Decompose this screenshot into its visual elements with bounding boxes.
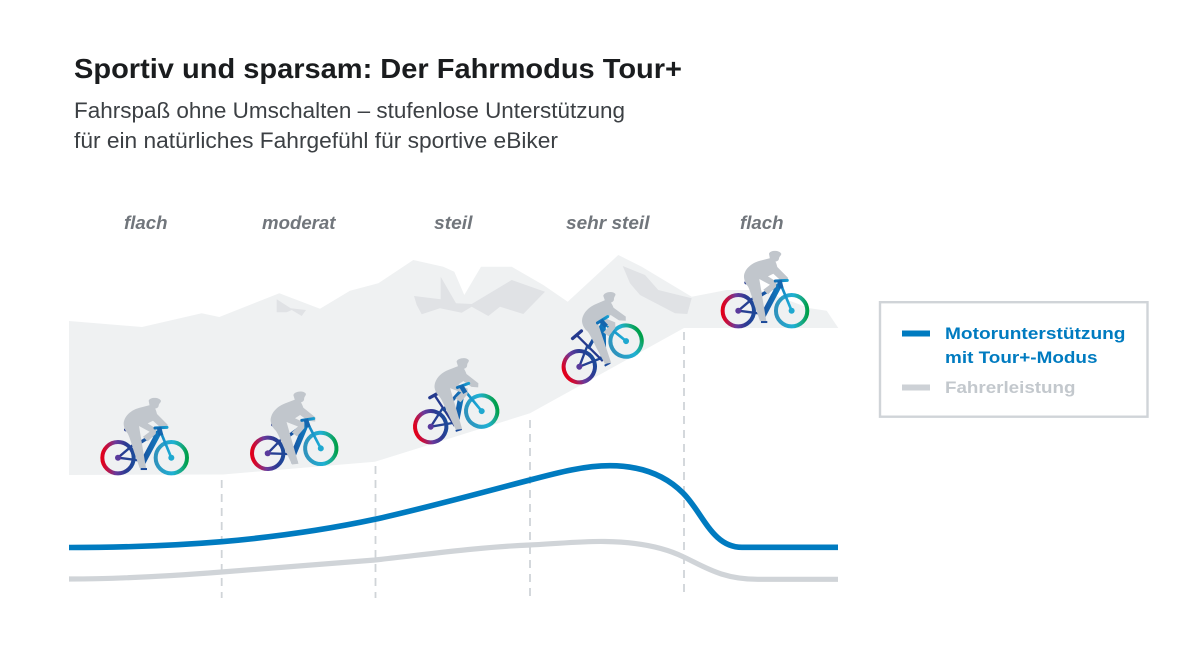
title: Sportiv und sparsam: Der Fahrmodus Tour+ xyxy=(74,53,682,84)
terrain labels: steil xyxy=(434,213,474,233)
line: rider power xyxy=(69,541,838,579)
legend text: motor support: mit Tour+-Modus xyxy=(945,348,1098,367)
legend text: rider power: Fahrerleistung xyxy=(945,378,1076,397)
dashed dividers xyxy=(222,332,684,598)
cyclist 4 xyxy=(551,290,647,388)
subtitle: für ein natürliches Fahrgefühl für sportive eBiker xyxy=(74,128,559,153)
cyclist 2 xyxy=(249,390,338,470)
subtitle: Fahrspaß ohne Umschalten – stufenlose Unterstützung xyxy=(74,98,625,123)
mountain terrain xyxy=(69,255,838,475)
cyclist 5 xyxy=(723,251,807,326)
cyclist 3 xyxy=(407,357,501,446)
terrain labels: sehr steil xyxy=(566,213,651,233)
cyclist 1 xyxy=(102,398,187,473)
legend swatch: motor support xyxy=(902,330,930,336)
terrain labels xyxy=(124,213,784,233)
line: motor support xyxy=(69,466,838,548)
mountain shadow patches xyxy=(277,266,692,316)
legend swatch: rider power xyxy=(902,384,930,390)
terrain labels: moderat xyxy=(262,213,337,233)
legend text: motor support xyxy=(945,324,1126,367)
legend xyxy=(880,302,1148,417)
terrain labels: flach xyxy=(124,213,168,233)
legend text: motor support: Motorunterstützung xyxy=(945,324,1126,343)
terrain labels: flach xyxy=(740,213,784,233)
subtitle xyxy=(74,98,625,153)
